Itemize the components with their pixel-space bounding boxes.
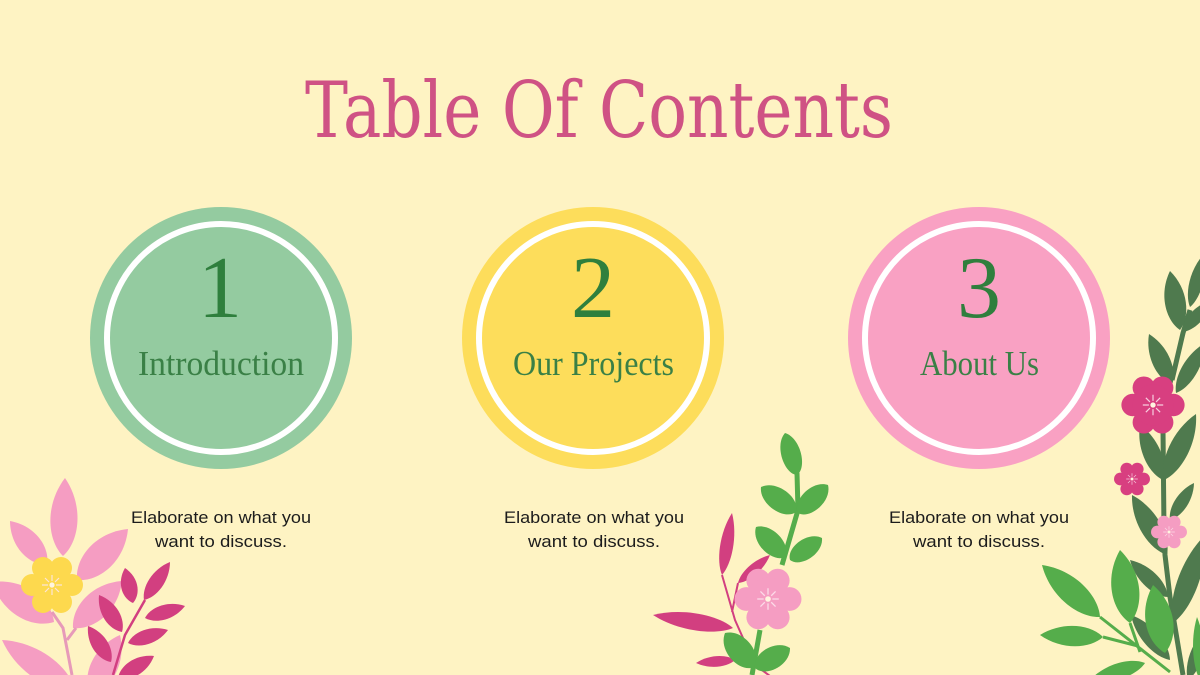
- icon: large magenta flower: [1121, 376, 1185, 434]
- icon: small magenta flower: [1114, 463, 1150, 495]
- description 3: [889, 508, 1069, 551]
- description 2: [504, 508, 684, 551]
- magenta sprig: [81, 558, 187, 675]
- plant: right side foliage: [1034, 253, 1200, 675]
- number 3: 3: [957, 240, 1001, 337]
- icon: yellow flower: [21, 557, 83, 613]
- label: our projects: Our Projects: [513, 344, 674, 383]
- panel: section 3 about us: [848, 207, 1110, 469]
- light green leaves: [1034, 548, 1200, 675]
- title: Table Of Contents: [305, 66, 893, 156]
- label: about us: About Us: [920, 344, 1039, 383]
- description 3: want to discuss.: [912, 532, 1045, 551]
- number 1: 1: [198, 240, 242, 337]
- number 2: 2: [571, 240, 615, 337]
- magenta stems and leaves: [652, 512, 773, 675]
- plant: bottom left pink and magenta foliage: [0, 478, 187, 675]
- description 1: [131, 508, 311, 551]
- description 1: want to discuss.: [154, 532, 287, 551]
- dark green branch: [1123, 253, 1200, 675]
- plant: bottom centre green and magenta sprig: [652, 430, 835, 675]
- panel: section 2 our projects: [462, 207, 724, 469]
- description 3: Elaborate on what you: [889, 508, 1069, 527]
- description 2: Elaborate on what you: [504, 508, 684, 527]
- label: introduction: Introduction: [138, 344, 304, 383]
- panel: section 1 introduction: [90, 207, 352, 469]
- green stem and leaves: [716, 430, 835, 675]
- description 1: Elaborate on what you: [131, 508, 311, 527]
- description 2: want to discuss.: [527, 532, 660, 551]
- icon: small pink flower: [1151, 516, 1187, 548]
- icon: pink flower: [735, 569, 801, 629]
